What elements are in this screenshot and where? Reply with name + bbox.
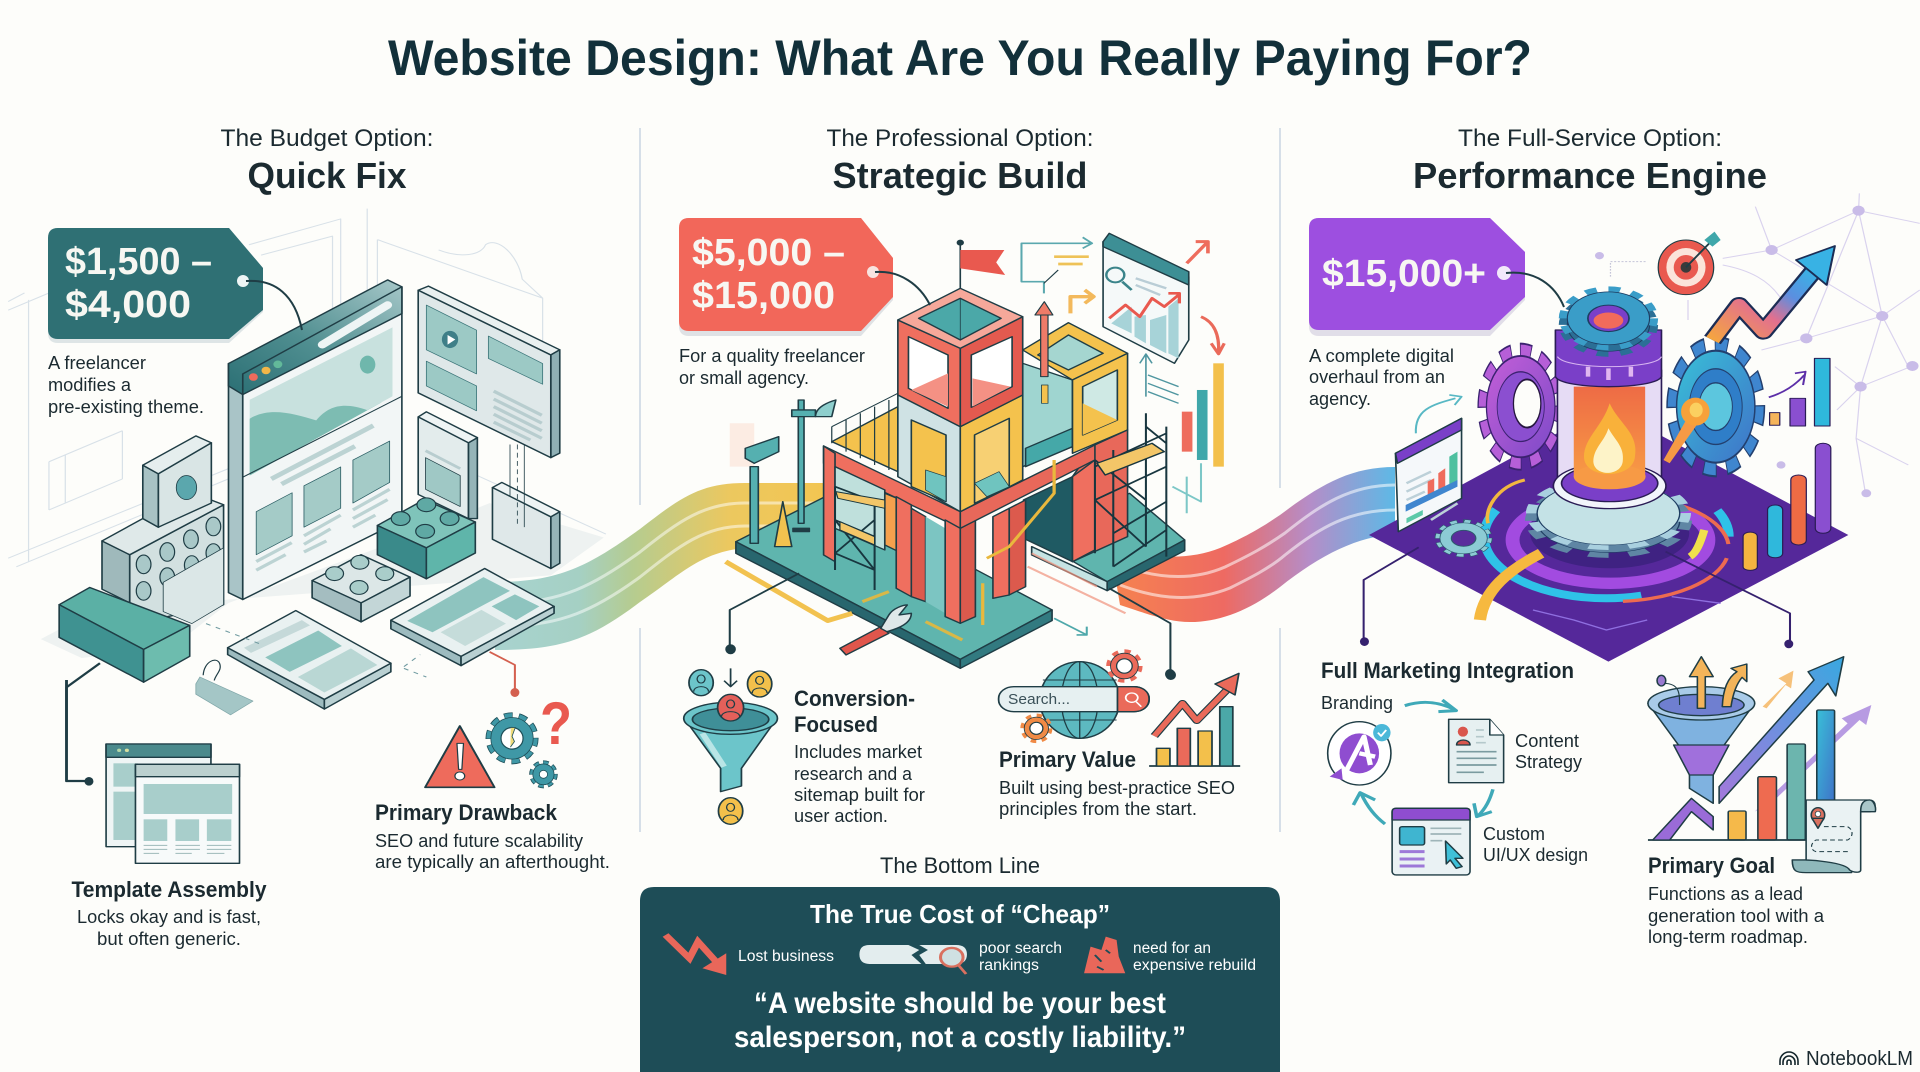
flowing band: professional to full-service [1110, 467, 1395, 622]
text block: conversion-focused [794, 686, 925, 826]
icon: globe and search [999, 653, 1149, 740]
text block: template assembly: Locks okay and is fast, [77, 907, 261, 927]
text block: conversion-focused: user action. [794, 806, 888, 826]
icon: funnel [684, 668, 777, 824]
cost label: poor search rankings: rankings [979, 957, 1039, 974]
description: full-service: agency. [1309, 389, 1371, 409]
connector dot [726, 645, 735, 654]
faded backdrop arrows [730, 423, 754, 467]
price tag: professional: $15,000 [692, 275, 835, 317]
text block: full marketing integration [1321, 658, 1588, 865]
heading: professional option: The Professional Option: [826, 125, 1094, 152]
description: budget [48, 353, 204, 417]
icon: flat tablet left [228, 611, 391, 709]
flowing band: budget to professional [495, 483, 830, 650]
icon: connector dot value [1166, 671, 1175, 679]
text block: primary value: Primary Value [999, 747, 1136, 772]
description: professional: For a quality freelancer [679, 346, 865, 366]
icon: brand badge [1328, 722, 1391, 785]
professional connector dot [1165, 669, 1175, 679]
network backdrop [1595, 193, 1920, 497]
text block: primary goal: long-term roadmap. [1648, 927, 1808, 947]
icon: purple base plate [1369, 407, 1848, 662]
icon: flame [1584, 403, 1635, 474]
icons: budget bottom row [67, 680, 554, 863]
icon: light building block [312, 555, 410, 622]
icon: loose tag piece [196, 660, 253, 715]
text block: template assembly: Template Assembly [72, 877, 267, 902]
text block: primary goal: Functions as a lead [1648, 884, 1803, 904]
cost label: expensive rebuild [1133, 940, 1256, 974]
text block: template assembly: but often generic. [97, 929, 241, 949]
panel: budget option illustration [8, 209, 606, 740]
icon: dashboard browser [1395, 418, 1462, 532]
text block: primary drawback: SEO and future scalability [375, 831, 583, 851]
icon: purple gear [1486, 356, 1555, 457]
connector: to value [1109, 588, 1170, 675]
connector dot [1360, 637, 1369, 646]
icon: flag [957, 240, 1005, 288]
icon: template windows [106, 744, 239, 863]
text block: conversion-focused: sitemap built for [794, 785, 925, 805]
text block: primary value: Built using best-practice SEO [999, 778, 1235, 798]
price tag: full-service: $15,000+ [1322, 253, 1486, 295]
icon: teal base block [59, 587, 190, 682]
text block: primary goal: generation tool with a [1648, 906, 1825, 926]
heading: the bottom line: The Bottom Line [880, 853, 1040, 878]
connector: to drawback [490, 652, 515, 691]
cost label: lost business: Lost business [738, 948, 834, 965]
text block: conversion-focused: research and a [794, 764, 913, 784]
icon: platform [736, 493, 1185, 668]
description: budget: modifies a [48, 375, 132, 395]
text block: primary value [999, 747, 1235, 819]
text block: template assembly [72, 877, 267, 949]
quote [734, 987, 1186, 1054]
icon: growth chart [1149, 673, 1240, 766]
icon: broken search bar [859, 945, 967, 974]
icon: blue gear [1677, 351, 1755, 463]
description: full-service: A complete digital [1309, 346, 1454, 366]
icon: branding cycle arrows [1353, 700, 1493, 824]
icon: warning triangle [425, 726, 494, 787]
text block: primary drawback: Primary Drawback [375, 800, 558, 825]
price tag: budget: $1,500 – [65, 241, 212, 283]
text block: primary value: principles from the start. [999, 799, 1197, 819]
text block: conversion-focused: Focused [794, 712, 878, 737]
icon: base gear [1537, 482, 1680, 552]
description: budget: pre-existing theme. [48, 397, 204, 417]
icon: scaffolding [835, 413, 1166, 590]
text block: primary goal: Primary Goal [1648, 853, 1775, 878]
heading: full-service option: Performance Engine [1413, 155, 1767, 196]
price tag: budget: $4,000 [65, 284, 191, 326]
cost label: expensive rebuild: need for an [1133, 940, 1211, 957]
icon: chart browser [1103, 233, 1189, 363]
icon: flow arrows and bars [1021, 237, 1224, 403]
panel: bottom line banner [640, 887, 1280, 1072]
icon: base disk [1530, 498, 1689, 568]
icon: small gear [533, 764, 554, 785]
icon: rings on plate [1480, 475, 1729, 630]
icon: energy beam [1664, 398, 1710, 463]
panel: professional option illustration [726, 233, 1224, 675]
icon: roadmap scroll [1792, 800, 1876, 873]
icon: second floor [832, 393, 1023, 512]
icon: floating layout panel [418, 286, 560, 458]
description: full-service [1309, 346, 1454, 409]
icon: growth arrow [1712, 246, 1835, 340]
heading: budget option [220, 125, 434, 196]
text block: full marketing integration: Custom [1483, 824, 1545, 844]
cost label: poor search rankings [979, 940, 1062, 974]
icon: stacked blocks [102, 436, 224, 624]
description: full-service: overhaul from an [1309, 367, 1445, 387]
icon: up arrow [1035, 302, 1053, 403]
text block: full marketing integration: Strategy [1515, 752, 1582, 772]
icon: dark building block [377, 498, 475, 579]
heading: full-service option: The Full-Service Option: [1458, 125, 1722, 152]
price tag: professional [679, 218, 930, 336]
icon: rear yellow block [1023, 323, 1128, 467]
icon: UI window [1392, 808, 1470, 875]
connector: to template [67, 663, 100, 740]
icon: falling arrow [666, 935, 726, 975]
icon: top bar chart [1769, 358, 1830, 426]
text block: full marketing integration: Branding [1321, 693, 1393, 713]
icon: lamp posts and cone [745, 400, 836, 547]
icon: reactor cylinder [1553, 370, 1666, 509]
search placeholder: Search... [1008, 691, 1070, 708]
icon: content document [1449, 719, 1504, 783]
icon: broken gear [491, 718, 533, 759]
heading: professional option: Strategic Build [832, 155, 1088, 196]
text block: primary drawback: are typically an afterthought. [375, 852, 610, 872]
quote: “A website should be your best [754, 987, 1166, 1020]
connector: to conversion [730, 573, 799, 648]
icon: bar chart on plate [1743, 443, 1831, 570]
icon: reactor cap [1555, 330, 1661, 387]
icon: wrench [840, 605, 911, 655]
description: budget: A freelancer [48, 353, 146, 373]
text block: primary drawback [375, 800, 610, 872]
icon: target [1658, 232, 1721, 295]
icon: coral ground floor [824, 430, 1128, 623]
title: Website Design: What Are You Really Paying For? [388, 30, 1532, 86]
description: professional [679, 346, 865, 388]
icon: main browser window [228, 280, 402, 600]
price tag: professional: $5,000 – [692, 232, 845, 274]
price tag: budget [48, 228, 302, 343]
text block: full marketing integration: UI/UX design [1483, 845, 1588, 865]
description: professional: or small agency. [679, 368, 809, 388]
icon: growth funnel [1648, 657, 1871, 840]
icon: rubble [1084, 937, 1125, 973]
cost label: poor search rankings: poor search [979, 940, 1062, 957]
icon: top gear [1567, 292, 1650, 351]
text block: conversion-focused: Includes market [794, 742, 922, 762]
banner heading: The True Cost of “Cheap” [810, 899, 1110, 929]
icon: question mark: ? [540, 690, 572, 757]
text block: conversion-focused: Conversion- [794, 686, 915, 711]
connector end [67, 680, 89, 781]
quote: salesperson, not a costly liability.” [734, 1021, 1186, 1054]
text block: primary goal [1648, 853, 1825, 947]
icon: small gear on plate [1440, 523, 1487, 554]
text block: full marketing integration: Content [1515, 731, 1579, 751]
heading: budget option: Quick Fix [248, 155, 406, 196]
icon: lower right panel [492, 445, 560, 569]
cost label: expensive rebuild: expensive rebuild [1133, 957, 1256, 974]
heading: professional option [826, 125, 1094, 196]
price tag: full-service [1309, 218, 1564, 336]
icons: full-service bottom row [1328, 657, 1876, 875]
icons: professional bottom row [684, 653, 1240, 824]
icon: top cube [898, 288, 1023, 427]
connector: to goal [1666, 552, 1790, 642]
panel: full-service option illustration [1360, 193, 1920, 662]
icon: flat tablet right [391, 569, 554, 666]
connector dot [510, 688, 519, 697]
connector dot [84, 777, 93, 786]
connector dot [1784, 640, 1793, 648]
heading: budget option: The Budget Option: [220, 125, 434, 152]
connector: to marketing [1364, 547, 1419, 640]
notebooklm mark: NotebookLM [1806, 1048, 1913, 1070]
heading: full-service option [1413, 125, 1767, 196]
text block: full marketing integration: Full Marketing Integration [1321, 658, 1574, 683]
icon: small floating panel [418, 412, 477, 519]
